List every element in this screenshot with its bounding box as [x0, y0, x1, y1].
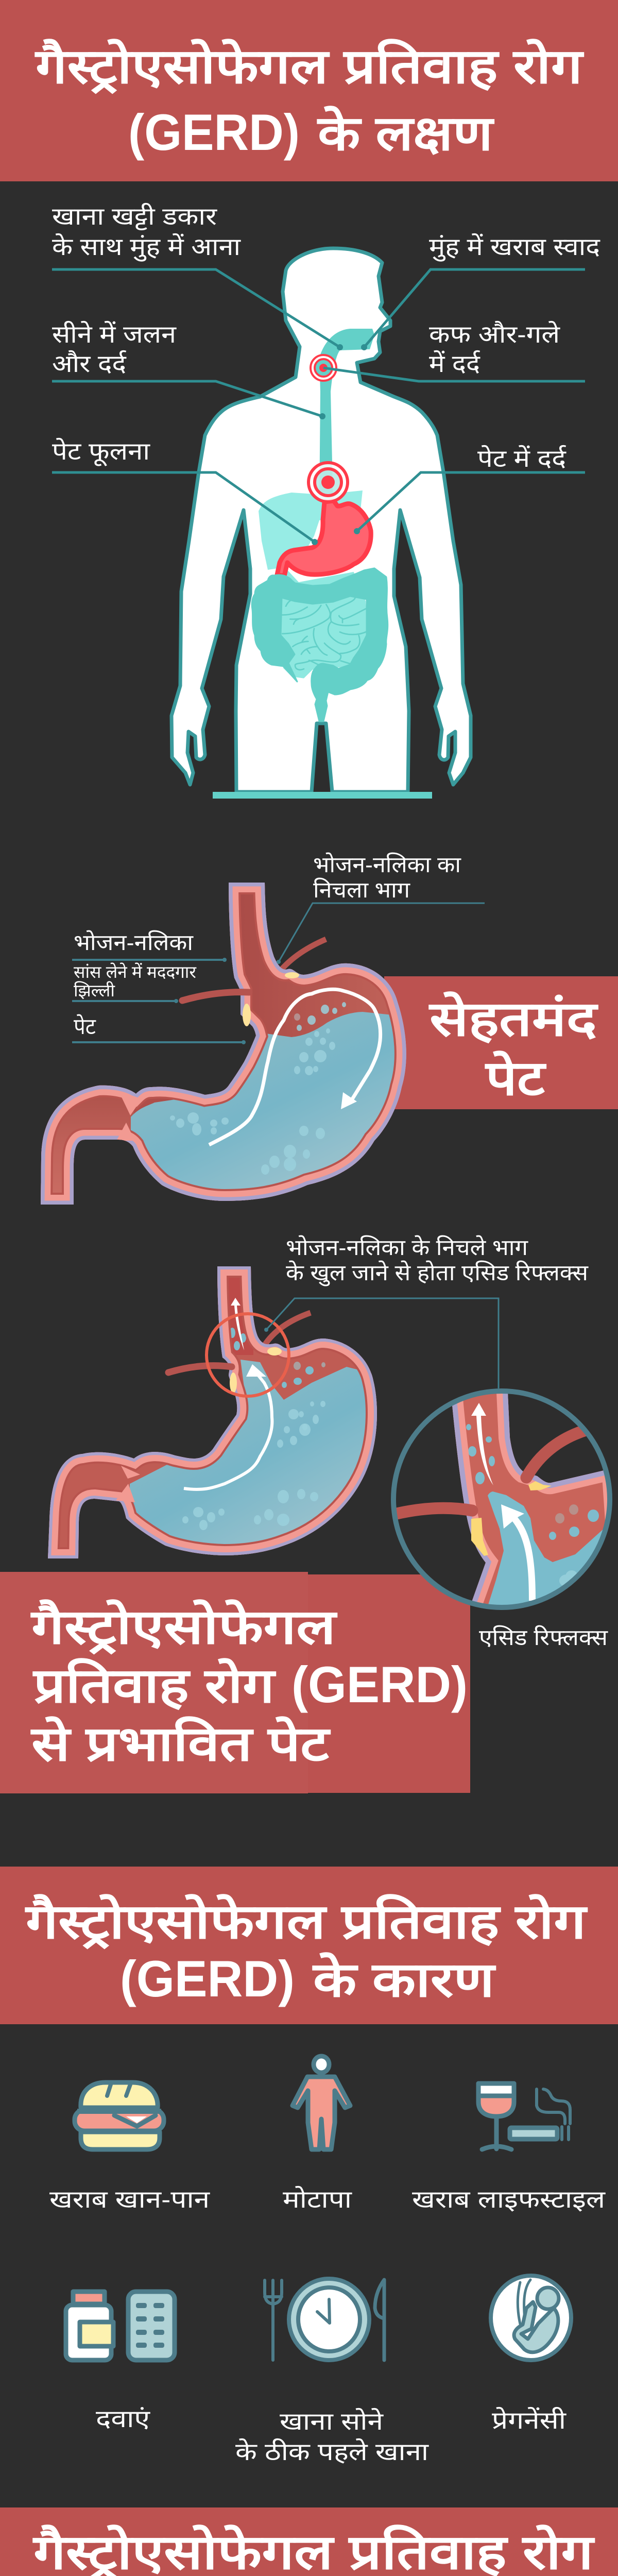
label: lower esophageal sphincter: निचला भाग	[313, 877, 410, 903]
caption: reflux leader: भोजन-नलिका के निचले भाग	[286, 1235, 528, 1260]
label: heartburn	[52, 320, 325, 419]
title banner: causes: (GERD)	[120, 1950, 295, 2007]
magnified fat	[471, 1481, 552, 1556]
magnified arrows	[471, 1403, 536, 1601]
liver	[259, 490, 363, 570]
title banner: symptoms: (GERD)	[128, 104, 300, 161]
label: bad diet: खराब खान-पान	[49, 2185, 210, 2213]
title banner: symptoms	[0, 0, 618, 181]
label: bloating: पेट फूलना	[52, 437, 150, 466]
fat deposits	[230, 1347, 282, 1393]
section: healthy stomach	[31, 852, 618, 1216]
highlight ring	[207, 1314, 289, 1396]
body silhouette	[171, 248, 471, 792]
caption: acid reflux: एसिड रिफ्लक्स	[479, 1625, 608, 1650]
GERD stomach illustration	[48, 1266, 377, 1558]
fat deposits	[243, 972, 299, 1026]
cause: medicines	[66, 2292, 175, 2360]
label: belching	[52, 202, 343, 350]
section: symptoms	[0, 0, 618, 799]
banner: healthy stomach: पेट	[485, 1050, 547, 1105]
small intestine	[279, 569, 367, 679]
label: esophagus	[72, 930, 227, 962]
label: obesity: मोटापा	[283, 2185, 352, 2213]
label: stomach	[72, 1014, 246, 1044]
banner: healthy stomach	[384, 976, 618, 1109]
diaphragm muscle right	[277, 939, 326, 975]
diaphragm muscle left	[182, 992, 249, 1001]
label: stomach pain	[354, 445, 585, 534]
label: bloating	[52, 437, 318, 545]
stomach	[277, 501, 371, 576]
label: stomach pain: पेट में दर्द	[477, 445, 566, 472]
label: diaphragm: सांस लेने में मददगार	[74, 962, 197, 981]
label: cough and sore throat: कफ और-गले	[429, 320, 560, 348]
title banner: causes	[0, 1867, 618, 2024]
title banner: symptoms: गैस्ट्रोएसोफेगल प्रतिवाह रोग	[35, 39, 585, 94]
cause: pregnancy	[491, 2276, 571, 2360]
label: cough and sore throat	[323, 320, 585, 381]
label: eating before sleep	[235, 2408, 429, 2465]
section: prevention	[0, 2507, 618, 2576]
flow arrow	[209, 989, 381, 1145]
label: bad lifestyle: खराब लाइफस्टाइल	[412, 2185, 606, 2213]
cause: bad lifestyle	[478, 2083, 570, 2149]
banner: GERD affected stomach	[0, 1572, 470, 1793]
section: causes	[0, 1867, 618, 2465]
label: belching: खाना खट्टी डकार	[52, 202, 217, 230]
magnified view	[391, 1381, 618, 1618]
label: medicines: दवाएं	[96, 2405, 150, 2432]
body figure with organs	[171, 248, 471, 799]
cause: eating before sleep	[265, 2279, 384, 2360]
label: eating before sleep: खाना सोने	[280, 2408, 384, 2435]
diaphragm muscle right	[264, 1313, 311, 1346]
label: cough and sore throat: में दर्द	[429, 350, 480, 377]
cause: obesity	[293, 2056, 350, 2149]
target: throat	[311, 355, 336, 381]
section: GERD affected stomach	[0, 1235, 618, 1793]
healthy stomach illustration	[41, 883, 406, 1205]
label: diaphragm: झिल्ली	[74, 981, 115, 1000]
title banner: symptoms: के लक्षण	[317, 106, 494, 160]
caption: reflux leader	[264, 1235, 589, 1388]
stomach cross-section	[48, 1266, 377, 1558]
magnified muscles	[397, 1508, 472, 1514]
caption: reflux leader: के खुल जाने से होता एसिड रिफ्लक्स	[286, 1260, 589, 1286]
label: lower esophageal sphincter: भोजन-नलिका का	[313, 852, 461, 877]
magnified tissue	[452, 1394, 607, 1605]
label: lower esophageal sphincter	[277, 852, 485, 964]
diaphragm muscle left	[168, 1366, 232, 1372]
label: belching: के साथ मुंह में आना	[52, 233, 241, 262]
label: bad taste	[361, 233, 600, 350]
title banner: causes: गैस्ट्रोएसोफेगल प्रतिवाह रोग	[25, 1894, 588, 1950]
banner: GERD affected stomach: प्रतिवाह रोग	[32, 1658, 277, 1713]
banner: GERD affected stomach: (GERD)	[291, 1656, 468, 1713]
label: pregnancy: प्रेगनेंसी	[492, 2406, 566, 2434]
label: bad taste: मुंह में खराब स्वाद	[429, 233, 600, 262]
label: heartburn: सीने में जलन	[52, 320, 177, 348]
reflux arrow large	[184, 1364, 272, 1489]
large intestine	[252, 568, 388, 721]
label: eating before sleep: के ठीक पहले खाना	[235, 2438, 429, 2465]
label: stomach: पेट	[74, 1014, 96, 1039]
target: chest	[308, 463, 348, 502]
banner: GERD affected stomach: गैस्ट्रोएसोफेगल	[30, 1599, 338, 1655]
label: esophagus: भोजन-नलिका	[74, 930, 194, 955]
label: diaphragm	[72, 962, 197, 1003]
cause: bad diet	[75, 2082, 164, 2149]
title banner: prevention	[0, 2507, 618, 2576]
banner: healthy stomach: सेहतमंद	[428, 991, 599, 1046]
lower section	[0, 2507, 618, 2576]
esophagus	[319, 329, 374, 510]
label: heartburn: और दर्द	[52, 350, 127, 377]
banner: GERD affected stomach: से प्रभावित पेट	[30, 1716, 331, 1771]
stomach cross-section	[41, 883, 406, 1205]
reflux arrow small	[231, 1298, 244, 1350]
title banner: causes: के कारण	[312, 1952, 496, 2007]
feet base bar	[213, 792, 432, 799]
